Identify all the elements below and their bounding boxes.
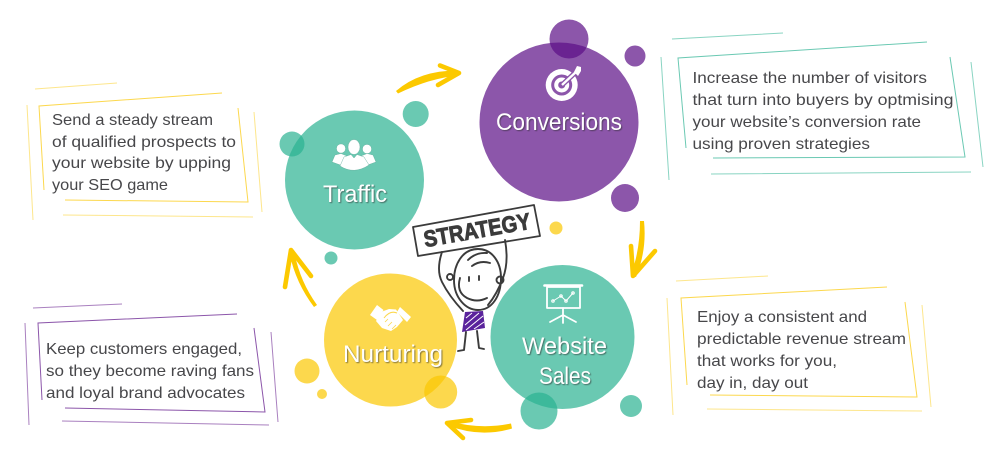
icon: handshake (370, 305, 411, 331)
node: traffic (280, 101, 429, 264)
text: nurturing description (46, 341, 254, 402)
frame: conversions (661, 33, 983, 180)
arrow: traffic to conversions (396, 66, 459, 94)
text: nurturing description: and loyal brand advocates (46, 385, 245, 402)
icon: presentation board (544, 286, 582, 323)
panel: website sales description (667, 276, 931, 415)
panel: conversions description (661, 33, 983, 180)
icon: dart target (546, 66, 581, 101)
node: website sales (490, 265, 642, 430)
node: nurturing (294, 222, 562, 408)
text: conversions description: using proven strategies (692, 136, 870, 153)
text: website sales description: day in, day out (697, 375, 809, 392)
text: traffic description: Send a steady stream (52, 112, 213, 129)
text: conversions description: your website’s conversion rate (692, 114, 921, 131)
sign: strategy: STRATEGY (422, 208, 532, 252)
icon: people group (332, 140, 376, 170)
arrow: website sales to nurturing (447, 420, 512, 438)
text: website sales description (697, 309, 906, 392)
label: traffic: Traffic (323, 181, 387, 208)
label: conversions: Conversions (496, 109, 622, 136)
frame: traffic (27, 83, 262, 220)
label: website sales: Sales (539, 363, 591, 390)
circles: nurturing (294, 222, 562, 408)
circles: traffic (280, 101, 429, 264)
label: website sales (522, 333, 607, 390)
figure: stick person (439, 240, 507, 351)
panel: traffic description (27, 83, 262, 220)
text: traffic description (52, 112, 236, 194)
text: traffic description: your website by upping (52, 155, 231, 172)
circles: website sales (490, 265, 642, 430)
text: nurturing description: Keep customers engaged, (46, 341, 242, 358)
text: conversions description: that turn into buyers by optmising (692, 92, 954, 109)
text: website sales description: Enjoy a consistent and (697, 309, 867, 326)
circles: conversions (480, 20, 646, 212)
label: website sales: Website (522, 333, 607, 360)
text: website sales description: predictable revenue stream (697, 331, 906, 348)
text: traffic description: of qualified prospects to (52, 134, 236, 151)
frame: nurturing (25, 304, 278, 425)
character holding strategy sign (413, 205, 540, 351)
text: conversions description: Increase the number of visitors (692, 70, 927, 87)
label: nurturing: Nurturing (343, 341, 443, 368)
arrow: conversions to website sales (631, 221, 655, 277)
text: conversions description (692, 70, 954, 153)
frame: website sales (667, 276, 931, 415)
arrow: nurturing to traffic (285, 250, 317, 307)
panel: nurturing description (25, 304, 278, 425)
text: nurturing description: so they become raving fans (46, 363, 254, 380)
node: conversions (480, 20, 646, 212)
text: website sales description: that works for you, (697, 353, 837, 370)
text: traffic description: your SEO game (52, 177, 168, 194)
